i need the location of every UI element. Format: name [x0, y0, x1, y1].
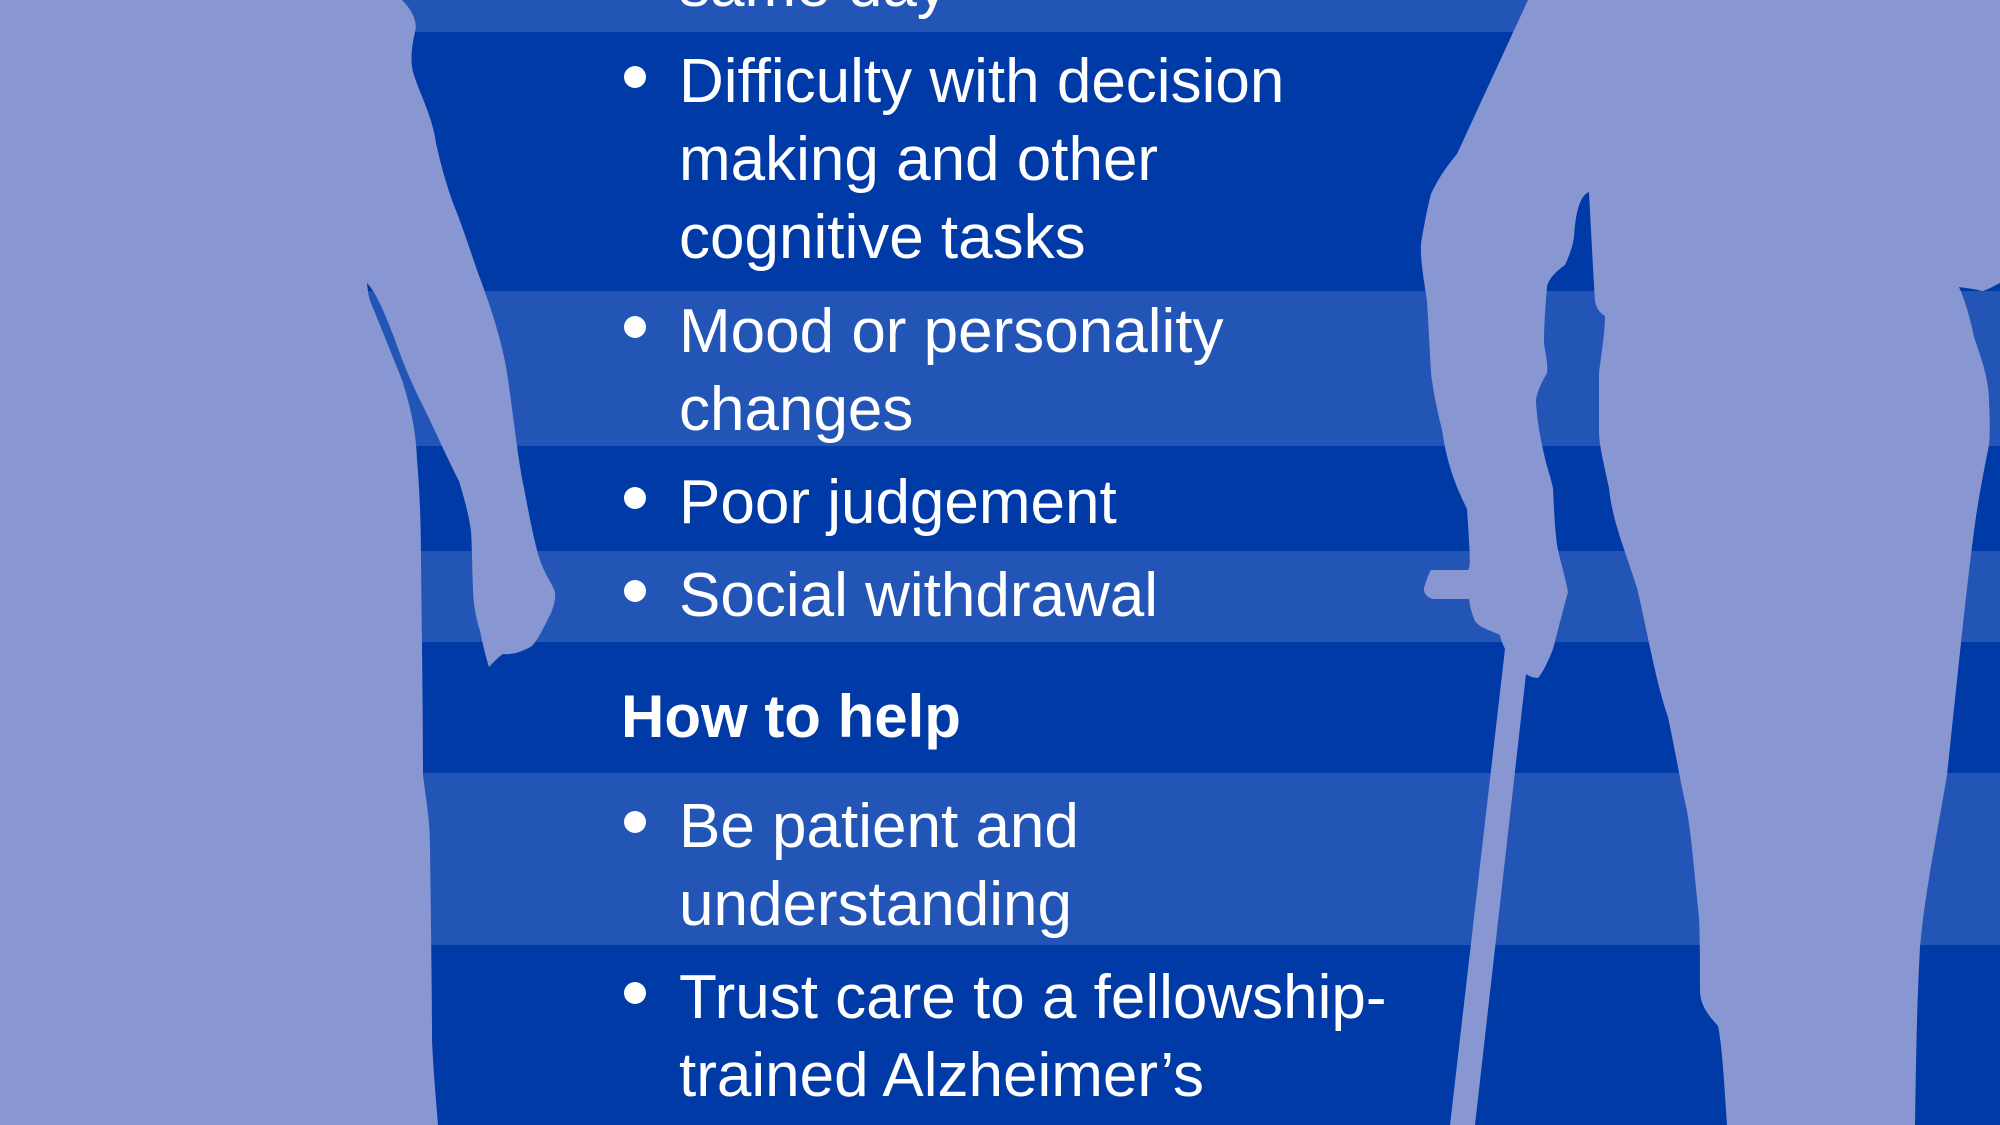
list item: be patient: understanding: [679, 870, 1072, 939]
list item: decision making: [624, 47, 1284, 272]
list item: mood: changes: [679, 375, 913, 444]
list item: mood: [624, 297, 1224, 444]
list item: decision making: making and other: [679, 125, 1158, 194]
heading: How to help: How to help: [621, 683, 961, 750]
list item: trust care: Trust care to a fellowship-: [679, 963, 1387, 1032]
list item: social withdrawal: Social withdrawal: [679, 561, 1158, 630]
list item: poor judgement: Poor judgement: [679, 468, 1117, 537]
right silhouette figure with cane: [1421, 0, 2000, 1125]
list item: trust care: [624, 963, 1387, 1110]
list item: be patient: [624, 792, 1079, 939]
list item: decision making: cognitive tasks: [679, 203, 1086, 272]
left silhouette figure: [0, 0, 555, 1125]
text: help list: [624, 792, 1387, 1110]
list item: mood: Mood or personality: [679, 297, 1224, 366]
list item: trust care: trained Alzheimer’s: [679, 1041, 1204, 1110]
list item: decision making: Difficulty with decision: [679, 47, 1284, 116]
text: symptoms list (continued): [624, 0, 1284, 630]
list item: be patient: Be patient and: [679, 792, 1079, 861]
